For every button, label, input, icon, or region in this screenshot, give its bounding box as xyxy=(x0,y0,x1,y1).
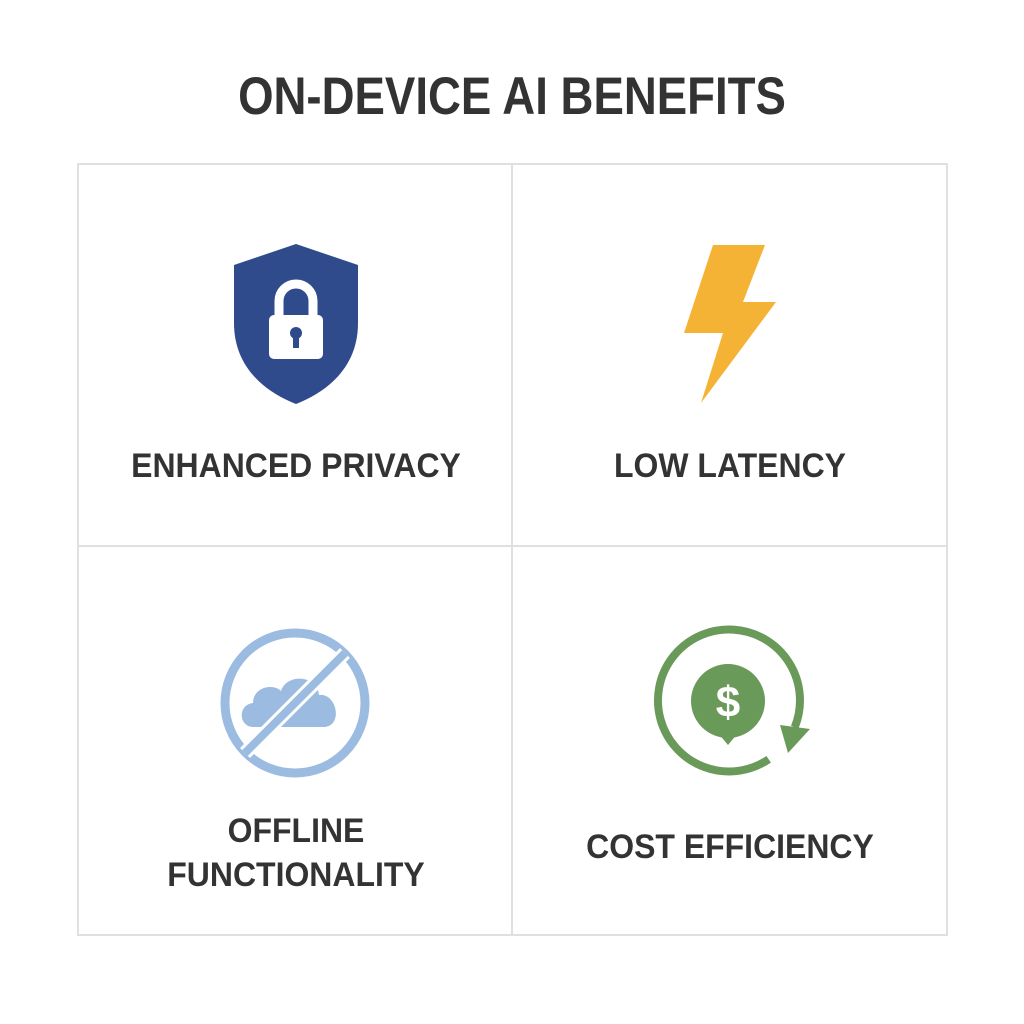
label: LOW LATENCY xyxy=(614,447,846,485)
label xyxy=(167,812,425,894)
grid frame xyxy=(77,163,948,936)
icon: lightning xyxy=(684,245,776,403)
label: OFFLINE xyxy=(228,812,364,850)
icon: shield lock xyxy=(234,244,358,404)
label: COST EFFICIENCY xyxy=(586,828,874,866)
panel: cost efficiency xyxy=(586,626,874,866)
icon: cycle dollar xyxy=(654,626,810,776)
icon: no cloud xyxy=(220,628,370,778)
label: ENHANCED PRIVACY xyxy=(131,447,461,485)
icon: cycle dollar: $ xyxy=(716,678,740,727)
title: ON-DEVICE AI BENEFITS xyxy=(238,67,786,126)
panel: enhanced privacy xyxy=(131,244,461,485)
panel: offline functionality xyxy=(167,628,425,894)
panel: low latency xyxy=(614,245,846,485)
label: FUNCTIONALITY xyxy=(167,856,425,894)
